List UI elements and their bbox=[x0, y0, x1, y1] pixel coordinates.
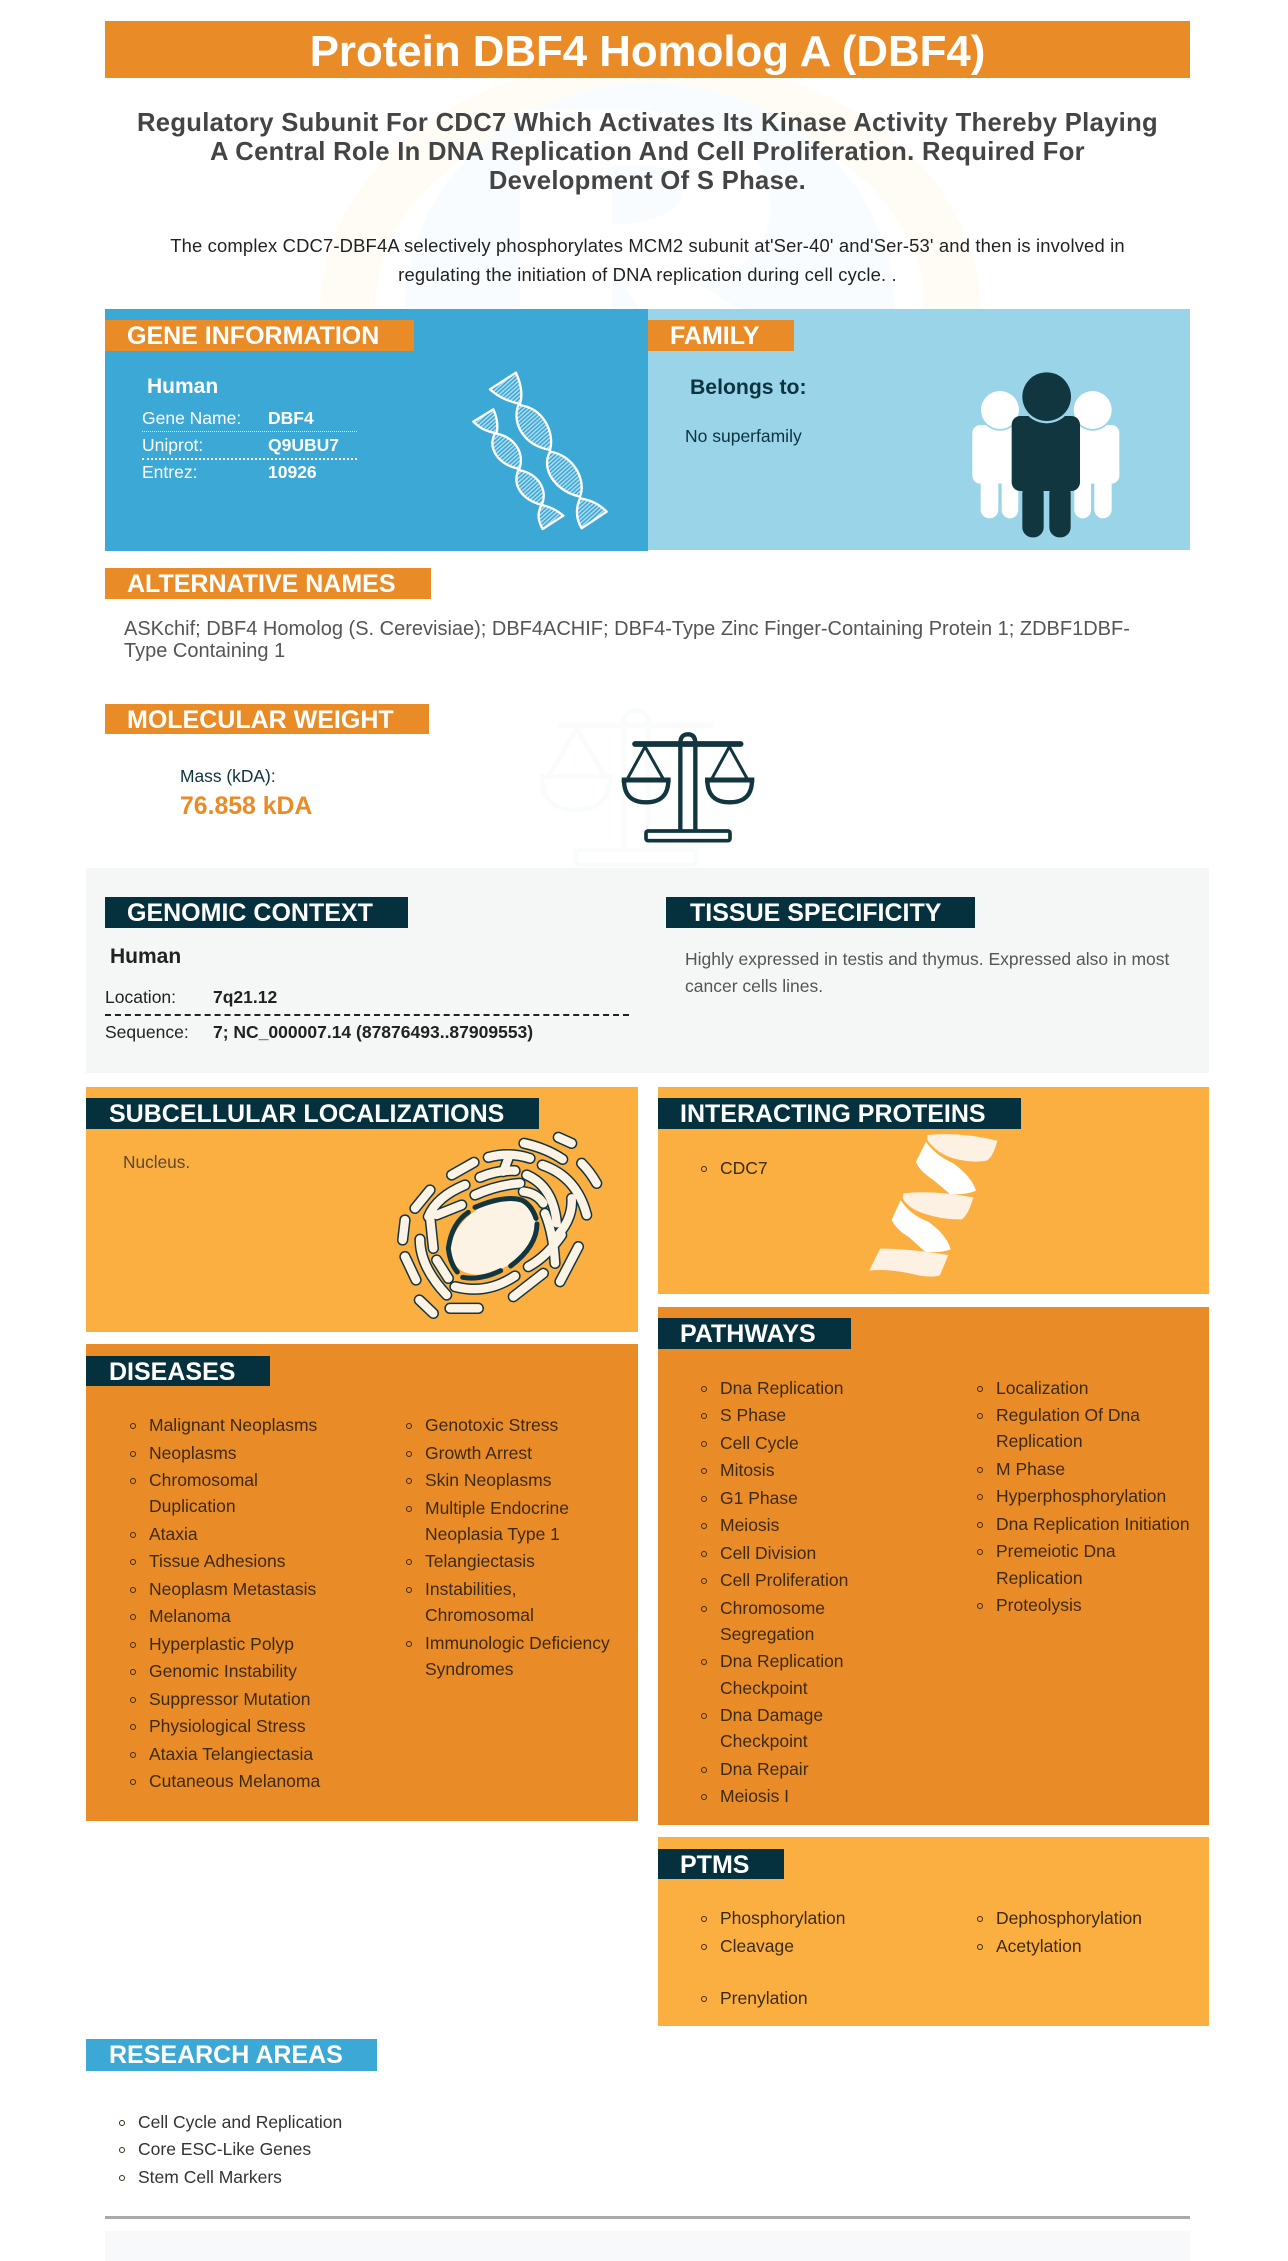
uniprot row bbox=[142, 435, 339, 455]
pathway list: left column: G1 Phase bbox=[720, 1488, 798, 1508]
disease list: right column: Telangiectasis bbox=[425, 1551, 535, 1571]
subtitle bbox=[137, 109, 1158, 195]
mass label: Mass (kDA): bbox=[180, 766, 276, 786]
pathway list: left column: Cell Cycle bbox=[720, 1433, 799, 1453]
description paragraph: The complex CDC7-DBF4A selectively phosphorylates MCM2 subunit at'Ser-40' and'Ser-53' and then is involved in bbox=[170, 235, 1125, 256]
tissue specificity text: Highly expressed in testis and thymus. Expressed also in most bbox=[685, 949, 1169, 969]
location row bbox=[105, 987, 277, 1007]
heading: ptms bbox=[658, 1849, 784, 1879]
pathway list: left column: Chromosome bbox=[720, 1598, 825, 1618]
heading: gene information: GENE INFORMATION bbox=[127, 322, 379, 350]
pathway list: right column: Replication bbox=[996, 1431, 1083, 1451]
pathway list: right column: Localization bbox=[996, 1378, 1088, 1398]
heading: interacting proteins: INTERACTING PROTEINS bbox=[680, 1100, 986, 1128]
research areas list: Core ESC-Like Genes bbox=[138, 2139, 311, 2159]
icon: cell nucleus and organelles bbox=[397, 1132, 602, 1319]
ptm list: left column: Cleavage bbox=[720, 1936, 794, 1956]
panel: genomic context and tissue specificity bbox=[86, 868, 1209, 1073]
disease list: left column bbox=[130, 1415, 320, 1791]
pathway list: right column: M Phase bbox=[996, 1459, 1065, 1479]
disease list: left column: Chromosomal bbox=[149, 1470, 258, 1490]
disease list: left column: Suppressor Mutation bbox=[149, 1689, 310, 1709]
panel: interacting proteins bbox=[658, 1087, 1209, 1294]
disease list: right column bbox=[406, 1415, 610, 1679]
subtitle: Regulatory Subunit For CDC7 Which Activates Its Kinase Activity Thereby Playing bbox=[137, 109, 1158, 137]
species label: Human bbox=[110, 945, 181, 968]
tissue specificity text bbox=[685, 949, 1170, 996]
disease list: left column: Hyperplastic Polyp bbox=[149, 1634, 294, 1654]
heading: diseases bbox=[86, 1356, 270, 1386]
pathway list: right column: Regulation Of Dna bbox=[996, 1405, 1140, 1425]
research areas list: Stem Cell Markers bbox=[138, 2167, 282, 2187]
disease list: right column: Syndromes bbox=[425, 1659, 514, 1679]
title bbox=[105, 21, 1190, 78]
footer panel bbox=[105, 2231, 1190, 2261]
disease list: left column: Ataxia bbox=[149, 1524, 198, 1544]
ptm list: right column bbox=[977, 1908, 1142, 1956]
heading: family: FAMILY bbox=[670, 322, 759, 350]
pathway list: right column: Proteolysis bbox=[996, 1595, 1082, 1615]
pathway list: right column: Replication bbox=[996, 1568, 1083, 1588]
heading: tissue specificity: TISSUE SPECIFICITY bbox=[690, 899, 941, 927]
disease list: left column: Duplication bbox=[149, 1496, 236, 1516]
research areas list bbox=[119, 2112, 342, 2187]
disease list: right column: Growth Arrest bbox=[425, 1443, 532, 1463]
pathway list: left column: Checkpoint bbox=[720, 1731, 808, 1751]
panel: diseases bbox=[86, 1344, 638, 1821]
subtitle: Development Of S Phase. bbox=[489, 167, 806, 195]
pathway list: left column: Segregation bbox=[720, 1624, 814, 1644]
heading: pathways: PATHWAYS bbox=[680, 1320, 816, 1348]
protein list: CDC7 bbox=[720, 1158, 768, 1178]
icon: balance scale bbox=[622, 732, 754, 842]
disease list: left column: Physiological Stress bbox=[149, 1716, 306, 1736]
pathway list: left column: Dna Damage bbox=[720, 1705, 823, 1725]
heading: subcellular localizations: SUBCELLULAR LOCALIZATIONS bbox=[109, 1100, 504, 1128]
research areas list: Cell Cycle and Replication bbox=[138, 2112, 342, 2132]
location row: 7q21.12 bbox=[213, 987, 277, 1007]
sequence row: Sequence: bbox=[105, 1022, 189, 1042]
pathway list: left column: Checkpoint bbox=[720, 1678, 808, 1698]
icon: dna helices bbox=[472, 372, 608, 530]
disease list: left column: Malignant Neoplasms bbox=[149, 1415, 317, 1435]
heading: diseases: DISEASES bbox=[109, 1358, 235, 1386]
belongs to label: Belongs to: bbox=[690, 376, 807, 399]
mass value: 76.858 kDA bbox=[180, 793, 312, 820]
species label: Human bbox=[147, 375, 218, 398]
pathway list: right column: Premeiotic Dna bbox=[996, 1541, 1116, 1561]
icon: group of people bbox=[972, 372, 1120, 538]
gene name row bbox=[142, 408, 314, 428]
tissue specificity text: cancer cells lines. bbox=[685, 976, 823, 996]
location row: Location: bbox=[105, 987, 176, 1007]
icon: ghost scale bbox=[500, 700, 800, 870]
disease list: left column: Ataxia Telangiectasia bbox=[149, 1744, 313, 1764]
disease list: left column: Neoplasms bbox=[149, 1443, 237, 1463]
heading: pathways bbox=[658, 1318, 851, 1349]
disease list: left column: Melanoma bbox=[149, 1606, 231, 1626]
ptm list: right column: Dephosphorylation bbox=[996, 1908, 1142, 1928]
panel: gene information bbox=[105, 309, 648, 551]
description paragraph: regulating the initiation of DNA replication during cell cycle. . bbox=[398, 264, 897, 284]
pathway list: left column: Dna Replication bbox=[720, 1651, 844, 1671]
alternative names text: Type Containing 1 bbox=[124, 640, 285, 662]
disease list: left column: Cutaneous Melanoma bbox=[149, 1771, 320, 1791]
entrez row: 10926 bbox=[268, 462, 317, 482]
disease list: right column: Genotoxic Stress bbox=[425, 1415, 558, 1435]
disease list: right column: Immunologic Deficiency bbox=[425, 1633, 610, 1653]
title: Protein DBF4 Homolog A (DBF4) bbox=[310, 27, 985, 76]
pathway list: left column: Cell Proliferation bbox=[720, 1570, 848, 1590]
disease list: right column: Skin Neoplasms bbox=[425, 1470, 551, 1490]
family value: No superfamily bbox=[685, 426, 802, 446]
uniprot row: Uniprot: bbox=[142, 435, 203, 455]
gene name row: DBF4 bbox=[268, 408, 314, 428]
alternative names text bbox=[124, 618, 1130, 662]
disease list: right column: Instabilities, bbox=[425, 1579, 516, 1599]
ptm list: left column: Prenylation bbox=[720, 1988, 808, 2008]
heading: research areas: RESEARCH AREAS bbox=[109, 2041, 343, 2069]
heading: alternative names: ALTERNATIVE NAMES bbox=[127, 570, 396, 598]
disease list: left column: Tissue Adhesions bbox=[149, 1551, 286, 1571]
pathway list: left column bbox=[701, 1378, 848, 1806]
panel: ptms bbox=[658, 1837, 1209, 2026]
disease list: right column: Neoplasia Type 1 bbox=[425, 1524, 560, 1544]
disease list: right column: Multiple Endocrine bbox=[425, 1498, 569, 1518]
pathway list: left column: Cell Division bbox=[720, 1543, 816, 1563]
disease list: right column: Chromosomal bbox=[425, 1605, 534, 1625]
localization text: Nucleus. bbox=[123, 1152, 190, 1172]
panel: family bbox=[648, 309, 1190, 550]
entrez row bbox=[142, 462, 317, 482]
pathway list: left column: S Phase bbox=[720, 1405, 786, 1425]
pathway list: left column: Meiosis bbox=[720, 1515, 779, 1535]
pathway list: left column: Meiosis I bbox=[720, 1786, 789, 1806]
ptm list: left column bbox=[701, 1908, 846, 2008]
description paragraph bbox=[170, 235, 1125, 285]
sequence row: 7; NC_000007.14 (87876493..87909553) bbox=[213, 1022, 533, 1042]
disease list: left column: Neoplasm Metastasis bbox=[149, 1579, 316, 1599]
entrez row: Entrez: bbox=[142, 462, 197, 482]
pathway list: right column bbox=[977, 1378, 1190, 1615]
icon: alpha helix ribbon bbox=[869, 1134, 998, 1277]
ptm list: left column: Phosphorylation bbox=[720, 1908, 846, 1928]
disease list: left column: Genomic Instability bbox=[149, 1661, 297, 1681]
alternative names text: ASKchif; DBF4 Homolog (S. Cerevisiae); DBF4ACHIF; DBF4-Type Zinc Finger-Containing Protein 1; ZDBF1DBF- bbox=[124, 618, 1130, 640]
pathway list: left column: Dna Repair bbox=[720, 1759, 809, 1779]
gene name row: Gene Name: bbox=[142, 408, 241, 428]
subtitle: A Central Role In DNA Replication And Cell Proliferation. Required For bbox=[210, 138, 1085, 166]
pathway list: right column: Hyperphosphorylation bbox=[996, 1486, 1166, 1506]
heading: molecular weight: MOLECULAR WEIGHT bbox=[127, 706, 394, 734]
heading: family bbox=[648, 320, 794, 351]
pathway list: right column: Dna Replication Initiation bbox=[996, 1514, 1190, 1534]
uniprot row: Q9UBU7 bbox=[268, 435, 339, 455]
heading: genomic context: GENOMIC CONTEXT bbox=[127, 899, 373, 927]
panel: pathways bbox=[658, 1307, 1209, 1825]
heading: ptms: PTMS bbox=[680, 1851, 749, 1879]
panel: subcellular localizations bbox=[86, 1087, 638, 1332]
pathway list: left column: Dna Replication bbox=[720, 1378, 844, 1398]
ptm list: right column: Acetylation bbox=[996, 1936, 1082, 1956]
pathway list: left column: Mitosis bbox=[720, 1460, 774, 1480]
watermark logo bbox=[320, 78, 980, 309]
